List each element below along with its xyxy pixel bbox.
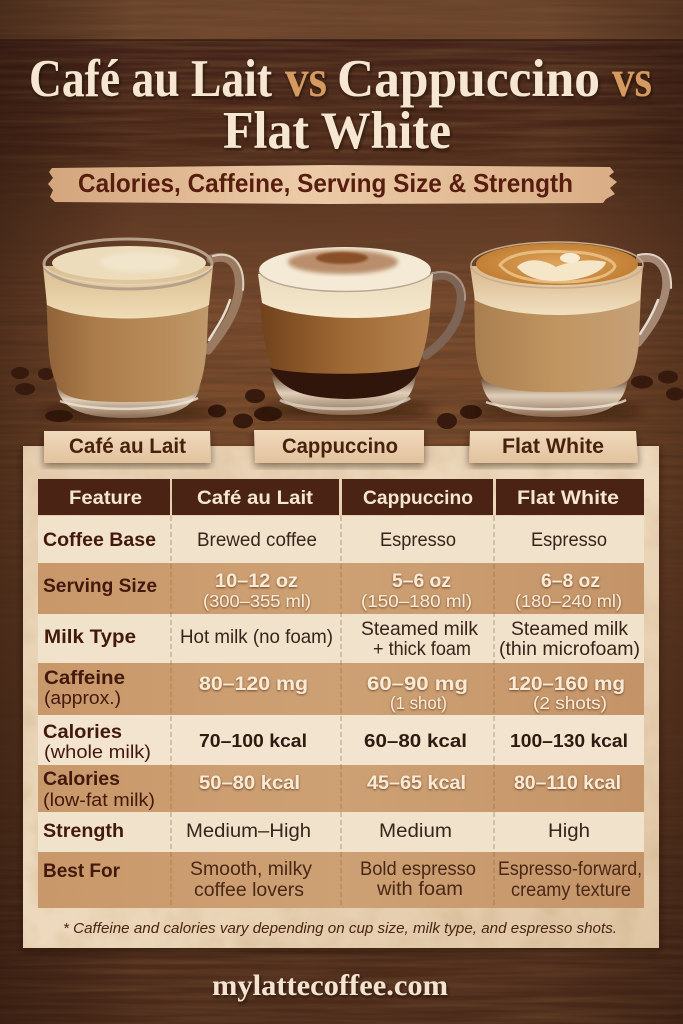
row: caffeine: (2 shots) [533,693,607,713]
website footer: mylattecoffee.com [212,969,448,1002]
subtitle banner: Calories, Caffeine, Serving Size & Strength [78,168,573,198]
row: serving size: (180–240 ml) [515,591,622,611]
row: coffee base: Brewed coffee [197,529,317,551]
row backgrounds [38,516,644,908]
row: caffeine: (approx.) [44,687,121,708]
row: strength: Medium–High [186,820,311,842]
cup: café au lait [42,239,243,421]
glass base [481,378,628,417]
row: best for [43,858,642,901]
row: calories whole milk: 70–100 kcal [199,730,307,751]
row: serving size: 10–12 oz [215,571,298,592]
cup: flat white [470,242,671,420]
row: milk type: Steamed milk [361,618,478,640]
row: serving size: (150–180 ml) [361,591,472,611]
row: coffee base: Coffee Base [43,530,156,551]
row: serving size: 6–8 oz [541,571,600,592]
tab: cappuccino [254,430,424,463]
espresso layer [270,366,420,399]
tab: cappuccino: Cappuccino [282,435,398,458]
row: strength: High [548,820,590,842]
row: milk type: Milk Type [44,627,136,648]
row: coffee base: Espresso [380,529,456,551]
foam dome [259,247,431,293]
row: caffeine: (1 shot) [390,693,447,713]
rim [471,242,643,288]
latte art [500,251,615,282]
row: calories whole milk: 100–130 kcal [510,730,628,751]
header row [38,479,644,515]
row: calories whole milk: 60–80 kcal [364,730,467,751]
coffee beans [11,367,683,429]
row: strength [43,820,590,842]
tab: flat white: Flat White [502,435,604,458]
title: vs [612,50,652,108]
row: strength: Strength [43,821,124,842]
coffee [260,285,431,398]
header row: Feature [69,487,142,509]
title [29,50,652,160]
row: best for: Bold espresso [360,858,476,880]
rim [44,239,212,289]
row: best for: coffee lovers [194,879,304,901]
row: best for: Smooth, milky [190,858,312,880]
row: milk type: Hot milk (no foam) [180,626,333,648]
foam band [470,266,643,315]
latte surface [476,243,638,285]
row: caffeine: Caffeine [44,668,125,689]
row: calories low-fat milk: 50–80 kcal [199,773,300,794]
row: calories low-fat milk: 80–110 kcal [514,773,621,794]
row: milk type [44,618,640,660]
coffee [474,290,641,392]
row: caffeine: 60–90 mg [367,674,468,695]
row: milk type: Steamed milk [511,618,628,640]
row: calories whole milk: Calories [43,722,122,743]
title: Cappuccino [337,50,600,108]
handle [426,272,465,355]
row: milk type: (thin microfoam) [499,638,640,660]
row: caffeine: 120–160 mg [508,674,625,695]
header row: Flat White [517,487,619,509]
header row: Café au Lait [197,487,314,509]
row: serving size: 5–6 oz [392,571,451,592]
handle [208,255,243,350]
tab: flat white [469,431,638,463]
title: Café au Lait [29,50,272,108]
row: serving size: Serving Size [43,576,157,597]
glass base [56,384,201,418]
row: strength: Medium [379,820,452,842]
row: calories whole milk [43,722,628,762]
header row: Cappuccino [363,487,473,509]
row: calories low-fat milk: (low-fat milk) [43,789,155,810]
footnote: * Caffeine and calories vary depending on cup size, milk type, and espresso shots. [63,920,617,937]
row: best for: Best For [43,861,121,882]
title: vs [285,50,327,108]
row: calories low-fat milk [43,769,621,810]
glass base [272,375,416,415]
foam top [52,246,206,280]
tab: café au lait: Café au Lait [69,435,186,458]
row: best for: with foam [376,878,463,900]
row: best for: Espresso-forward, [498,858,642,880]
title: Flat White [223,102,451,160]
row: serving size: (300–355 ml) [203,591,311,611]
cup: cappuccino [257,247,465,419]
row: calories low-fat milk: Calories [43,769,120,790]
table panel [23,446,659,948]
foam band [258,274,433,318]
row: calories whole milk: (whole milk) [44,741,151,762]
handle [638,254,671,343]
row: coffee base: Espresso [531,529,607,551]
row: serving size [43,571,622,611]
coffee [46,290,209,402]
row: caffeine [44,668,625,713]
row: coffee base [43,529,607,551]
row: calories low-fat milk: 45–65 kcal [367,773,466,794]
tab: café au lait [44,431,211,463]
row: best for: creamy texture [511,879,631,901]
row: milk type: + thick foam [373,638,471,660]
row: caffeine: 80–120 mg [199,674,308,695]
foam band [43,266,213,319]
